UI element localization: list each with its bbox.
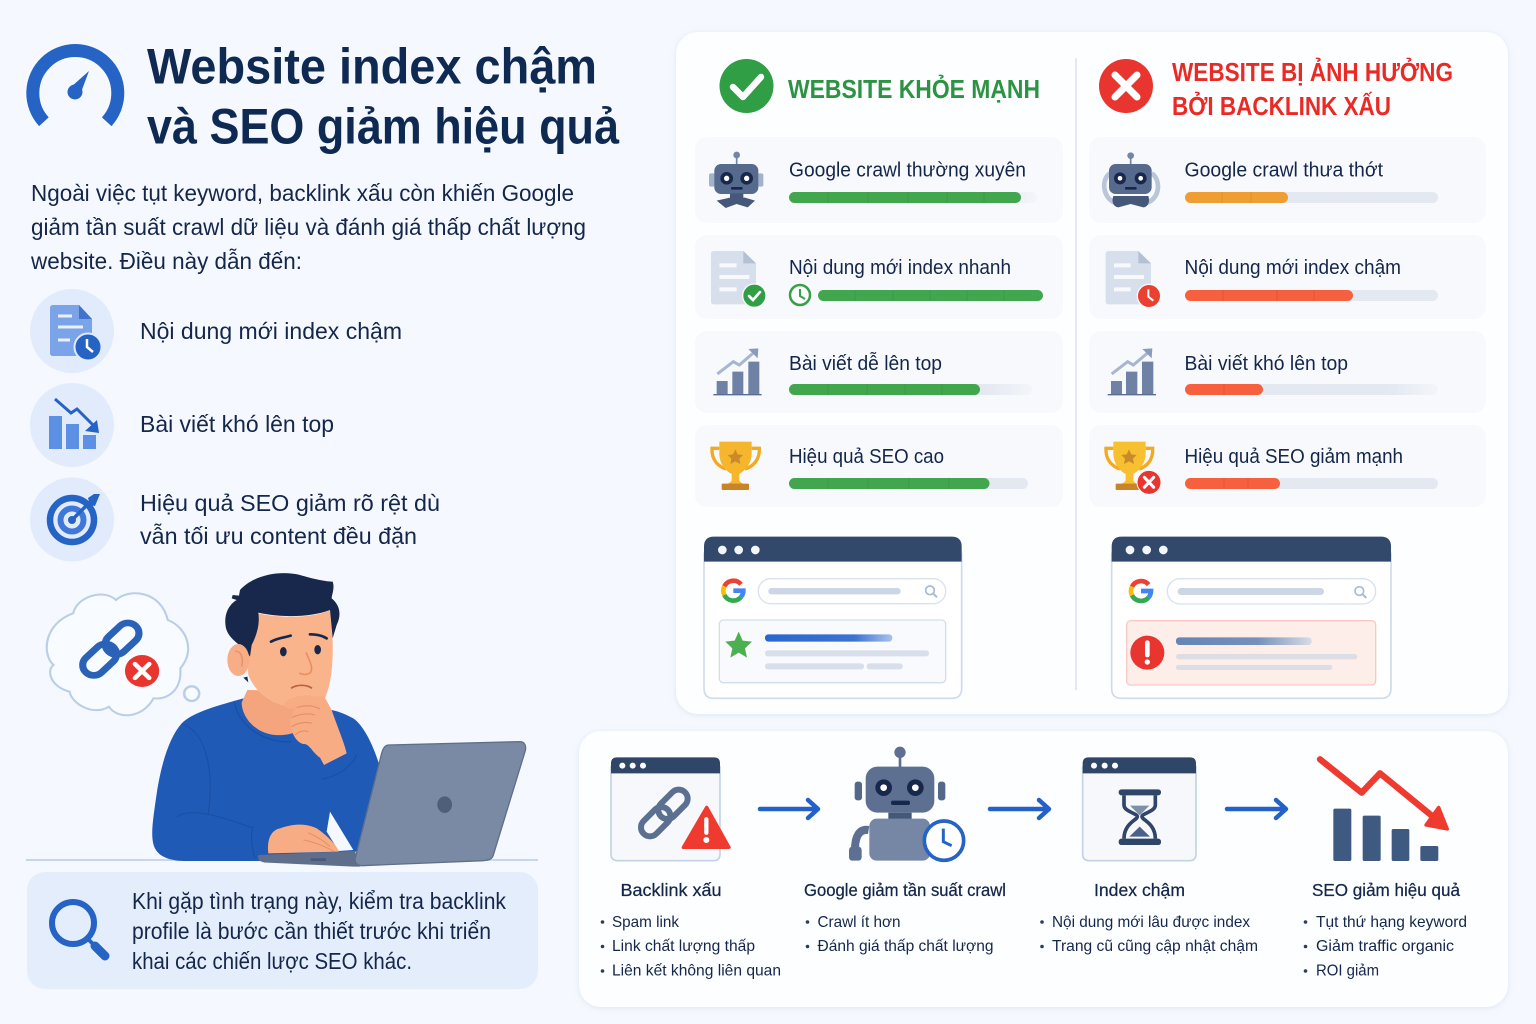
laptop base [258, 851, 360, 867]
icon: clock [790, 285, 810, 305]
bullet list: Nội dung mới lâu được index [1052, 914, 1250, 931]
person thinking at laptop [152, 573, 526, 867]
bar [1185, 192, 1438, 203]
bullet list: Link chất lượng thấp [612, 938, 755, 955]
header: affected website [1099, 56, 1453, 121]
row: new content indexed fast [695, 235, 1063, 319]
title: Website index chậm [147, 38, 597, 94]
bar [789, 384, 1032, 395]
hand on keyboard [268, 825, 339, 853]
row: high SEO performance [695, 425, 1063, 507]
row: Google crawl frequently: Google crawl thường xuyên [789, 160, 1026, 182]
list item: SEO drop [30, 478, 440, 562]
row: high SEO performance: Hiệu quả SEO cao [789, 446, 944, 468]
step: bad backlink [601, 757, 781, 980]
row: articles hard to rank [1089, 331, 1486, 413]
bullet list: Giảm traffic organic [1316, 938, 1454, 955]
bullet list [1304, 914, 1467, 980]
icon: robot [1104, 152, 1158, 207]
sweater [152, 698, 379, 861]
icon: trophy [712, 442, 759, 490]
bullet list [601, 914, 781, 980]
icon: robot with clock [849, 747, 964, 861]
hair [225, 573, 339, 657]
bullet list [806, 914, 994, 955]
list item: slow indexing: Nội dung mới index chậm [140, 318, 402, 344]
step: bad backlink: Backlink xấu [620, 880, 722, 900]
icon: document clock [1106, 251, 1161, 308]
row: Google crawl sparse: Google crawl thưa thớt [1184, 160, 1383, 182]
callout: check backlink profile: profile là bước cần thiết trước khi triển [132, 918, 491, 944]
facial features [271, 634, 327, 642]
browser: healthy search result [704, 537, 962, 698]
bar [1185, 290, 1438, 301]
row: SEO performance drops sharply: Hiệu quả SEO giảm mạnh [1184, 446, 1403, 468]
bullet list: Liên kết không liên quan [612, 962, 781, 980]
hand at chin [284, 695, 347, 765]
header: healthy website [720, 59, 1040, 113]
intro paragraph: website. Điều này dẫn đến: [30, 248, 302, 274]
title: và SEO giảm hiệu quả [147, 98, 620, 154]
ear [227, 644, 249, 676]
header: healthy website: WEBSITE KHỎE MẠNH [788, 73, 1040, 104]
panel: comparison [676, 32, 1508, 714]
bullet list: Trang cũ cũng cập nhật chậm [1052, 938, 1258, 955]
callout: check backlink profile [27, 872, 538, 989]
thought bubble with broken link [47, 593, 199, 715]
list item: SEO drop: Hiệu quả SEO giảm rõ rệt dù [140, 490, 440, 516]
icon: rising chart [713, 348, 762, 395]
icon: speedometer gauge [33, 51, 118, 122]
bullet list: Spam link [612, 914, 680, 931]
bar [1185, 384, 1438, 395]
icon: browser with broken link and warning [611, 757, 729, 861]
bullet list: Tụt thứ hạng keyword [1316, 914, 1467, 931]
arrow [760, 800, 818, 818]
row: new content indexed slowly [1089, 235, 1486, 319]
arrow [990, 800, 1049, 818]
icon: browser with hourglass [1083, 757, 1196, 861]
browser: penalised search result [1112, 537, 1391, 698]
bar [789, 192, 1037, 203]
list item: SEO drop: vẫn tối ưu content đều đặn [140, 523, 417, 549]
bar [1185, 478, 1438, 489]
list item: slow indexing [30, 289, 402, 373]
bar [818, 290, 1043, 301]
list item: hard to rank: Bài viết khó lên top [140, 411, 334, 437]
step: Google reduces crawl [804, 747, 1006, 955]
list item: hard to rank [30, 383, 334, 467]
header: affected website: WEBSITE BỊ ẢNH HƯỞNG [1172, 56, 1453, 87]
neck [242, 690, 327, 735]
face [247, 610, 333, 706]
panel: cause and effect flow [579, 731, 1508, 1007]
step: slow index [1040, 757, 1258, 955]
icon: document check [711, 251, 766, 307]
icon: chart [1108, 348, 1156, 395]
row: new content indexed fast: Nội dung mới index nhanh [789, 257, 1011, 279]
header: affected website: BỞI BACKLINK XẤU [1172, 90, 1391, 121]
bar [789, 478, 1028, 489]
row: new content indexed slowly: Nội dung mới index chậm [1184, 257, 1401, 279]
icon: falling bar chart [1320, 759, 1447, 861]
step: SEO loses effectiveness: SEO giảm hiệu quả [1312, 880, 1460, 900]
step: slow index: Index chậm [1094, 880, 1185, 900]
step: Google reduces crawl: Google giảm tần suất crawl [804, 880, 1006, 900]
row: Google crawl frequently [695, 137, 1063, 223]
laptop lid [355, 742, 526, 866]
icon: robot [709, 152, 763, 208]
callout: check backlink profile: khai các chiến lược SEO khác. [132, 948, 412, 974]
row: articles rank easily: Bài viết dễ lên top [789, 352, 942, 375]
icon: magnifier [52, 902, 105, 956]
bullet list [1040, 914, 1258, 955]
bullet list: Crawl ít hơn [818, 914, 900, 931]
intro paragraph [30, 180, 586, 274]
bullet list: Đánh giá thấp chất lượng [818, 938, 994, 955]
row: Google crawl sparse [1089, 137, 1486, 223]
row: SEO performance drops sharply [1089, 425, 1486, 507]
row: articles rank easily [695, 331, 1063, 413]
row: articles hard to rank: Bài viết khó lên top [1184, 353, 1348, 375]
icon: Google G [723, 581, 743, 601]
intro paragraph: giảm tần suất crawl dữ liệu và đánh giá thấp chất lượng [31, 214, 586, 240]
bullet list: ROI giảm [1316, 962, 1379, 980]
callout: check backlink profile: Khi gặp tình trạng này, kiểm tra backlink [132, 888, 506, 914]
step: SEO loses effectiveness [1304, 759, 1467, 980]
title [147, 38, 620, 154]
arrow [1227, 800, 1286, 818]
icon: Google G [1131, 581, 1151, 601]
icon: trophy with x [1106, 442, 1161, 494]
intro paragraph: Ngoài việc tụt keyword, backlink xấu còn khiến Google [31, 180, 574, 206]
